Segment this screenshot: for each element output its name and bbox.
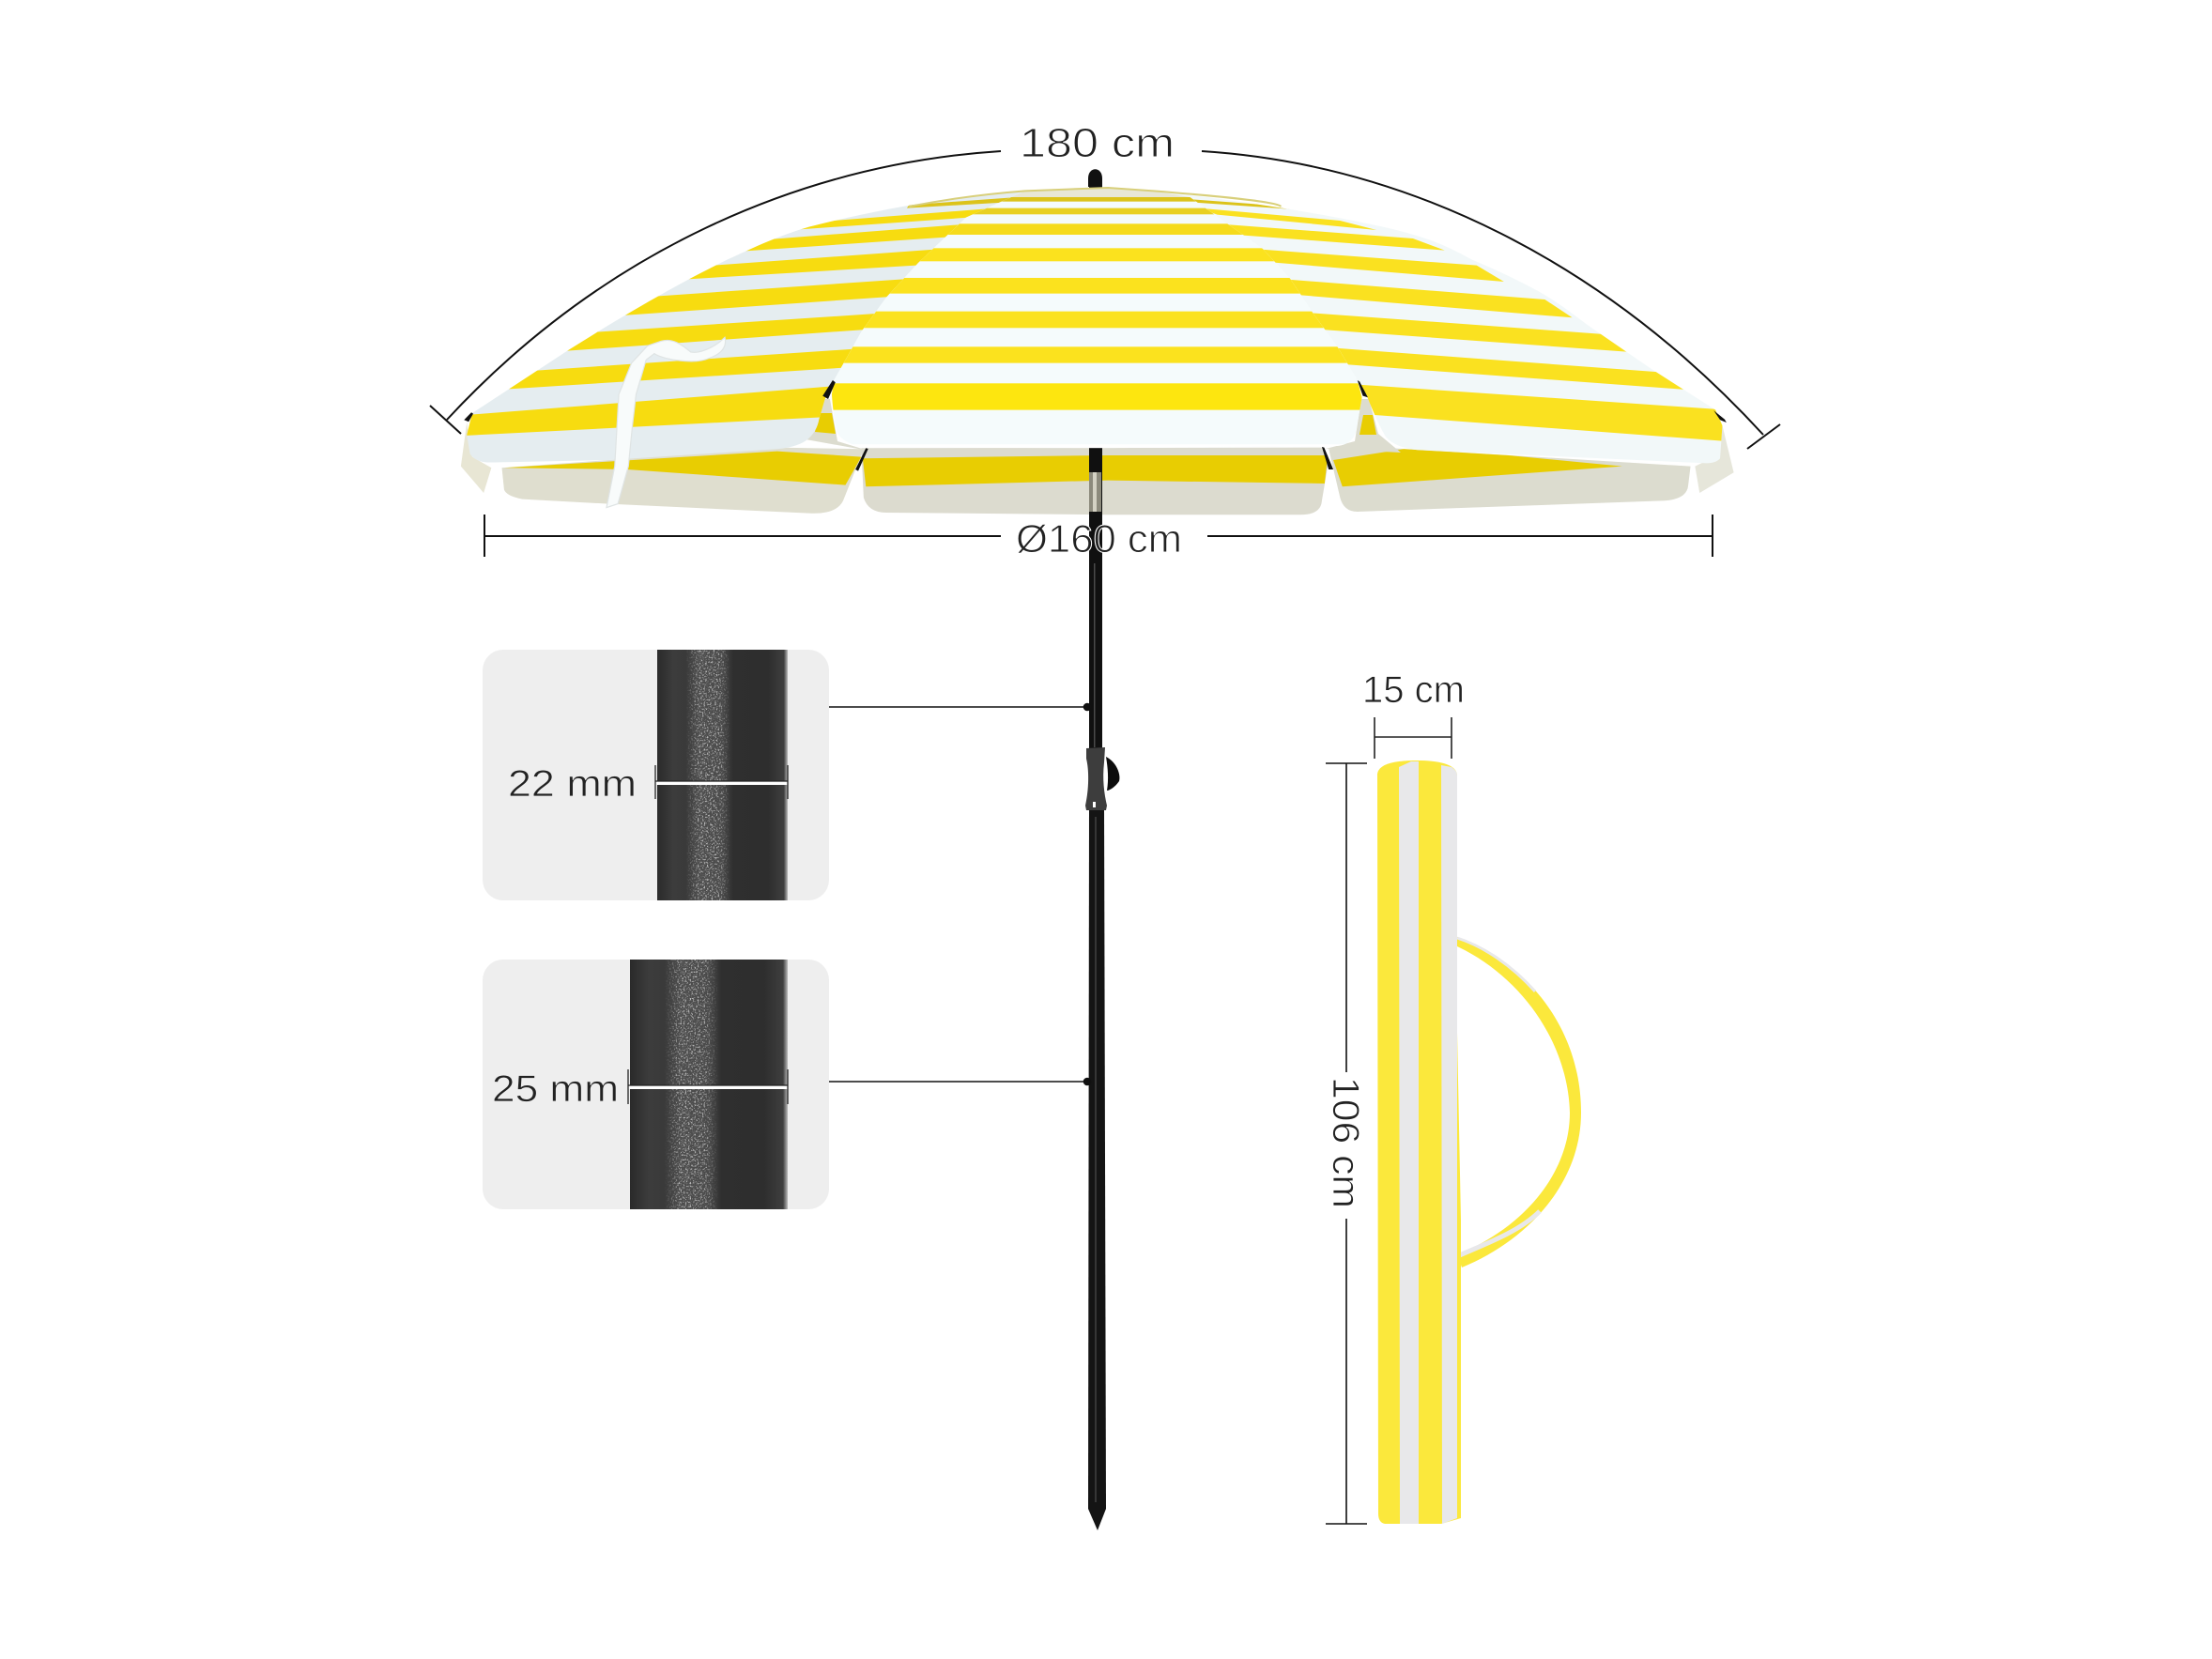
- right canopy panel: [1149, 185, 1741, 467]
- label: 15 cm: 15 cm: [1362, 669, 1465, 711]
- pole top cap: [1088, 169, 1102, 187]
- tilt mechanism: [1085, 747, 1119, 810]
- dimension: bag width 15 cm: [1375, 717, 1452, 759]
- upper pole close-up: [657, 650, 788, 900]
- leader lines to pole: [829, 704, 1091, 1085]
- label: diameter 160 cm: Ø160 cm: [1016, 516, 1182, 561]
- bag body: [1377, 760, 1461, 1524]
- canopy top rim: [909, 188, 1281, 207]
- label: 22 mm: 22 mm: [508, 763, 637, 805]
- dimension: diameter line: [484, 515, 1713, 557]
- canopy underside panels: [461, 422, 1734, 515]
- lower pole close-up: [630, 960, 788, 1209]
- canopy notches: visible inner fabric: [806, 399, 1401, 453]
- label: 106 cm: 106 cm: [1325, 1077, 1366, 1208]
- panel: lower pole detail 25 mm: [483, 960, 829, 1209]
- carry bag: [1377, 760, 1581, 1524]
- dimension: bag length 106 cm: [1326, 763, 1367, 1524]
- label: 180 cm: 180 cm: [1020, 120, 1175, 166]
- label: 25 mm: 25 mm: [492, 1068, 619, 1110]
- bag handle: [1457, 937, 1581, 1267]
- left canopy panel: [454, 185, 1046, 467]
- centre canopy panel: [822, 185, 1369, 451]
- white tie strap: [607, 337, 726, 508]
- ribs: [464, 380, 1727, 471]
- panel: upper pole detail 22 mm: [483, 650, 829, 900]
- infographic: umbrella dimensions: [429, 129, 1780, 1530]
- umbrella pole: [1088, 169, 1106, 1530]
- canopy: [454, 185, 1741, 508]
- measurement bar 22 mm: [655, 765, 788, 799]
- measurement bar 25 mm: [628, 1069, 788, 1104]
- dimension: arc 180 cm: [430, 151, 1780, 449]
